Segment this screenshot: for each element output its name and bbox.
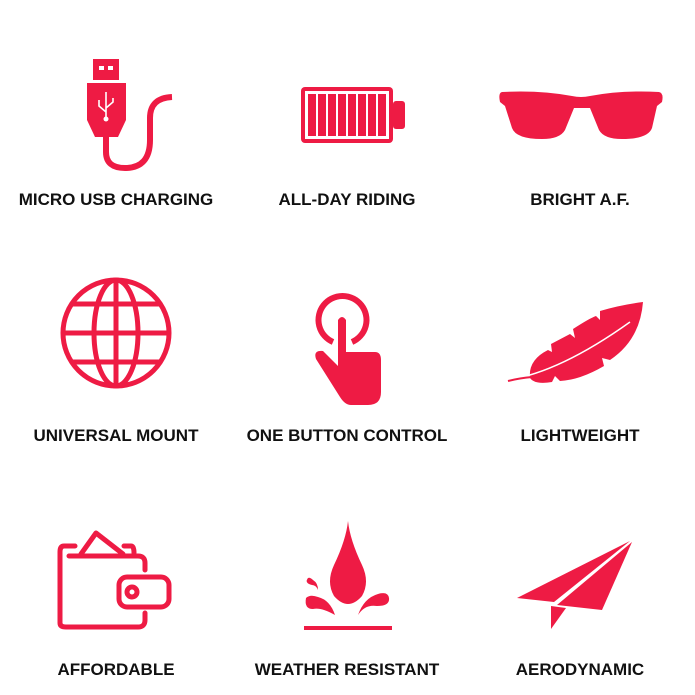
icon: globe <box>63 280 169 386</box>
icon: sunglasses <box>499 92 663 139</box>
icon: water drop <box>304 521 392 630</box>
icon: battery <box>301 87 405 143</box>
label: affordable: AFFORDABLE <box>57 660 175 679</box>
label: all-day: ALL-DAY RIDING <box>279 190 415 209</box>
icon: usb cable <box>87 59 172 168</box>
icon: paper plane <box>517 541 632 629</box>
label: micro usb: MICRO USB CHARGING <box>19 190 213 209</box>
label: bright: BRIGHT A.F. <box>530 190 630 209</box>
label: one button: ONE BUTTON CONTROL <box>247 426 447 445</box>
label: universal mount: UNIVERSAL MOUNT <box>34 426 199 445</box>
label: lightweight: LIGHTWEIGHT <box>521 426 640 445</box>
label: weather resistant: WEATHER RESISTANT <box>255 660 440 679</box>
icon: wallet <box>60 533 169 627</box>
icon: hand button <box>315 296 381 405</box>
label: aerodynamic: AERODYNAMIC <box>516 660 644 679</box>
icon: feather <box>508 302 643 383</box>
